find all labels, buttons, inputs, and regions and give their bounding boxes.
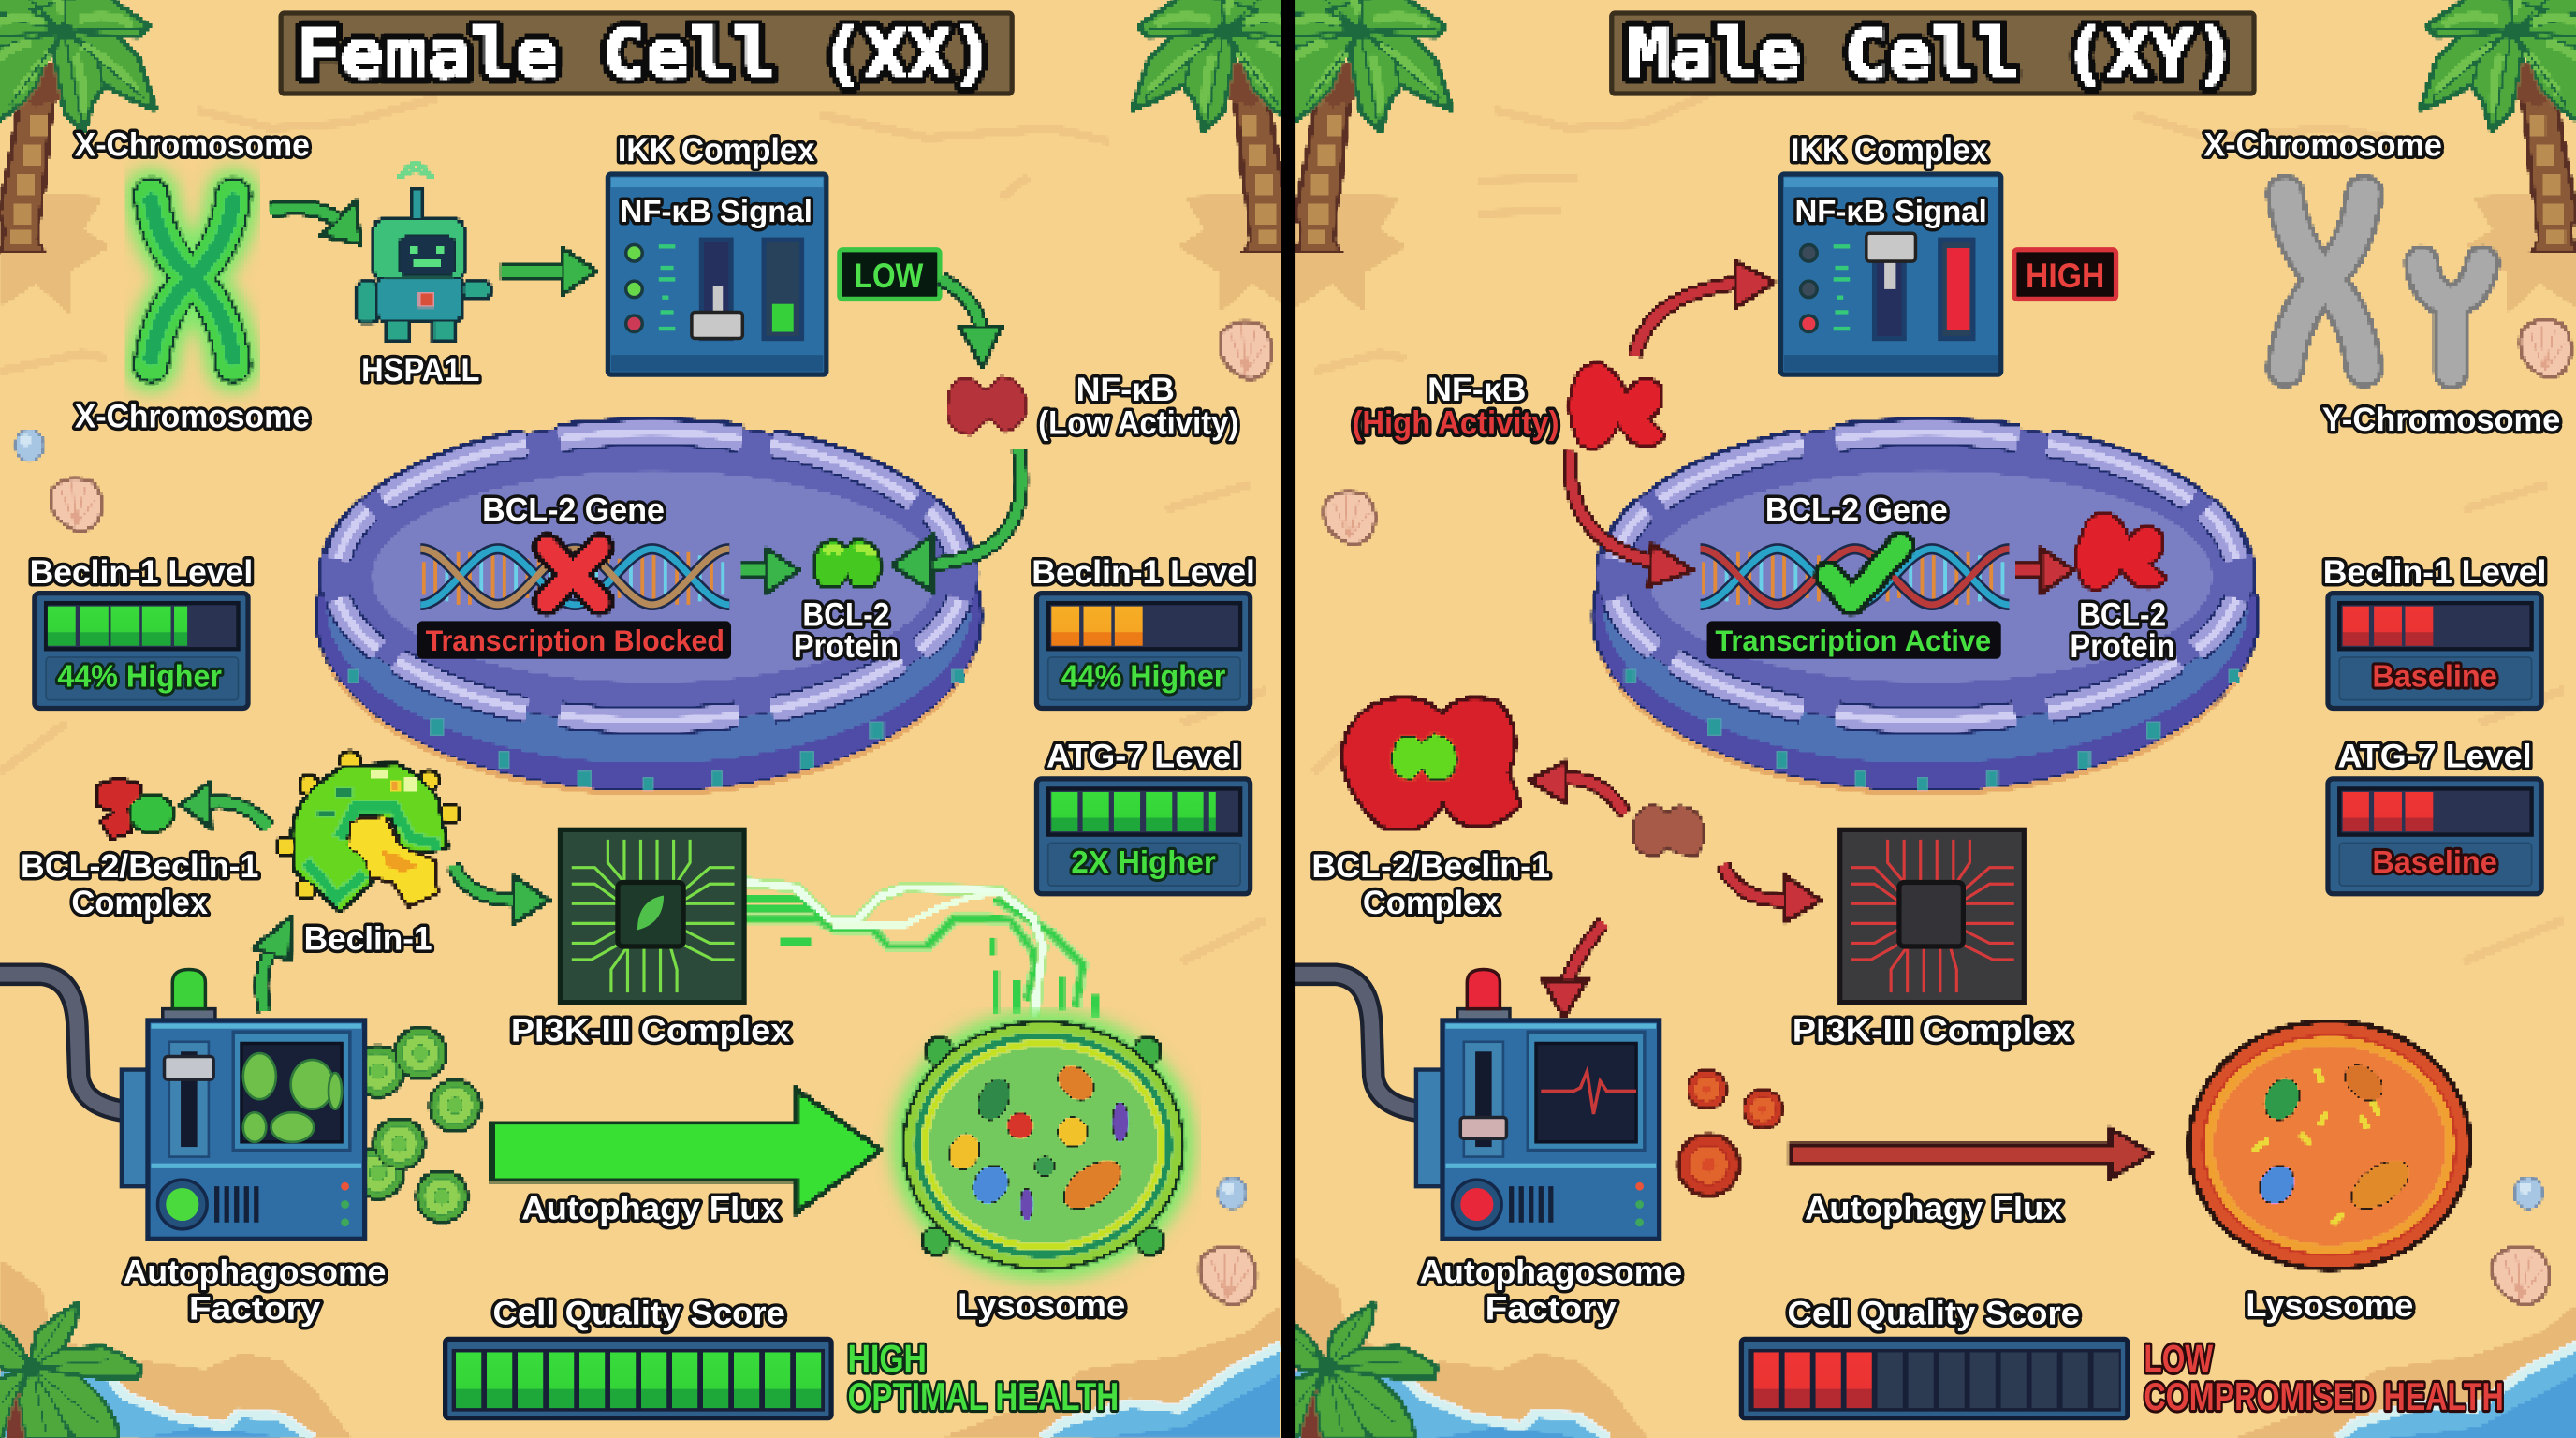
nucleus xyxy=(317,424,981,795)
panel: male cell xyxy=(1286,0,2576,1438)
DNA helix active xyxy=(1701,546,2009,605)
divider between panels xyxy=(1281,0,1295,1438)
label: ATG-7 Level: ATG-7 Level xyxy=(1046,739,1240,775)
lightning energy from PI3K to lysosome xyxy=(746,882,1096,1017)
icon: X chromosome glowing xyxy=(151,196,233,365)
palm tree bottom left xyxy=(0,1305,139,1438)
arrow: NF-kB to IKK xyxy=(1634,263,1773,355)
machine: autophagosome factory xyxy=(1292,970,1660,1239)
arrow: blob to complex xyxy=(1531,762,1625,814)
label: Autophagosome Factory xyxy=(124,1255,386,1327)
lysosome compromised xyxy=(2190,1022,2469,1269)
label: Transcription Active: Transcription Active xyxy=(1715,624,1991,657)
gauge: ATG-7 2X higher xyxy=(1036,779,1251,894)
label: BCL-2 Protein: Protein xyxy=(794,628,899,665)
arrow: LOW to NF-kB xyxy=(942,279,1001,365)
gauge: ATG-7 2X higher: 2X Higher xyxy=(1071,845,1216,880)
label: BCL-2 Protein: BCL-2 xyxy=(802,597,889,634)
icon: Beclin-1 low brown blob xyxy=(1633,807,1703,856)
autophagosome vesicles red xyxy=(1679,1071,1781,1195)
lysosome healthy xyxy=(892,1010,1194,1280)
signal light red xyxy=(1467,970,1500,1009)
chip: PI3K-III complex xyxy=(1840,829,2024,1003)
icon: BCL-2/Beclin-1 complex large xyxy=(1343,698,1519,829)
icon: BCL-2 protein red xyxy=(2077,514,2165,588)
chip: PI3K-III complex xyxy=(560,829,744,1003)
autophagosome vesicles xyxy=(353,1029,479,1221)
label: BCL-2 Gene: BCL-2 Gene xyxy=(482,492,665,528)
palm tree bottom left xyxy=(1290,1305,1436,1438)
gauge: Beclin-1 baseline xyxy=(2328,594,2541,708)
arrow: NF-kB to BCL-2 protein xyxy=(894,450,1021,590)
label: HIGH optimal health: OPTIMAL HEALTH xyxy=(848,1374,1119,1418)
title: Female Cell (XX): Female Cell (XX) xyxy=(297,14,995,93)
gauge: Beclin-1 baseline: Baseline xyxy=(2372,660,2497,695)
label: NF-kB low activity: (Low Activity) xyxy=(1038,404,1238,441)
icon: NF-kB high activity xyxy=(1570,364,1664,448)
label: LOW compromised health: LOW xyxy=(2144,1337,2213,1381)
label: Beclin-1 Level left: Beclin-1 Level xyxy=(30,554,253,591)
arrow: Beclin to complex xyxy=(183,784,268,827)
icon: NF-kB low activity xyxy=(948,378,1025,433)
label: NF-kB high activity xyxy=(1352,372,1559,441)
label: Transcription Blocked: Transcription Blocked xyxy=(426,624,724,657)
label: Cell Quality Score: Cell Quality Score xyxy=(1788,1296,2080,1332)
label: HIGH optimal health: HIGH xyxy=(848,1337,927,1381)
arrow: NF-kB into nucleus xyxy=(1570,452,1690,585)
label: X-Chromosome upper: X-Chromosome xyxy=(75,127,310,164)
machine: autophagosome factory xyxy=(0,970,365,1239)
label: Autophagosome Factory: Factory xyxy=(189,1290,321,1327)
label: BCL-2/Beclin-1 Complex xyxy=(21,848,258,921)
IKK control panel: NF-kB signal high xyxy=(1781,174,2001,374)
gauge: cell quality score high xyxy=(446,1339,831,1418)
label: NF-kB low activity xyxy=(1038,372,1238,441)
label: NF-kB Signal: NF-κB Signal xyxy=(621,195,812,229)
gauge: ATG-7 baseline: Baseline xyxy=(2372,845,2497,880)
arrow: DNA to protein xyxy=(741,550,797,592)
label: BCL-2 Protein xyxy=(2070,597,2175,665)
label: Beclin-1 Level: Beclin-1 Level xyxy=(2323,554,2546,591)
label: PI3K-III Complex: PI3K-III Complex xyxy=(1793,1013,2072,1049)
label: Autophagosome Factory: Autophagosome xyxy=(1419,1255,1682,1291)
shells and pebbles xyxy=(1325,321,2570,1303)
label: X-Chromosome: X-Chromosome xyxy=(2203,127,2442,164)
arrow: down to factory xyxy=(1544,923,1603,1016)
icon: grey X and Y chromosomes xyxy=(2285,194,2482,372)
label: NF-kB high activity: NF-κB xyxy=(1427,372,1526,408)
sand ripples xyxy=(1314,91,2563,961)
label: BCL-2 Protein: BCL-2 xyxy=(2079,597,2166,634)
label: IKK Complex: IKK Complex xyxy=(1791,132,1988,169)
beach and sea xyxy=(0,1260,1280,1438)
label: BCL-2 Protein xyxy=(794,597,899,665)
gauge: Beclin-1 44% higher green xyxy=(35,594,248,708)
shells and pebbles xyxy=(17,323,1271,1303)
arrow: blob to PI3K xyxy=(1723,866,1819,920)
label: HSPA1L: HSPA1L xyxy=(361,352,479,389)
title: Male Cell (XY): Male Cell (XY) xyxy=(1627,14,2237,93)
label: BCL-2/Beclin-1 Complex: BCL-2/Beclin-1 xyxy=(21,848,258,885)
gauge: ATG-7 baseline xyxy=(2328,779,2541,894)
arrow: big autophagy flux xyxy=(493,1091,879,1211)
badge: HIGH: HIGH xyxy=(2026,257,2104,295)
icon: BCL-2 protein green xyxy=(815,540,880,587)
palm tree top right xyxy=(2422,0,2576,312)
label: IKK Complex: IKK Complex xyxy=(618,132,815,169)
label: Beclin-1 Level right: Beclin-1 Level xyxy=(1032,554,1255,591)
label: BCL-2/Beclin-1 Complex: Complex xyxy=(71,885,208,921)
label: HIGH optimal health xyxy=(848,1337,1119,1418)
label: LOW compromised health xyxy=(2144,1337,2504,1418)
palm tree top left xyxy=(1286,0,1451,312)
arrow: X to HSPA1L xyxy=(271,204,359,243)
label: ATG-7 Level: ATG-7 Level xyxy=(2338,739,2532,775)
label: BCL-2/Beclin-1 Complex xyxy=(1311,848,1550,921)
IKK control panel: NF-kB signal low xyxy=(607,174,827,374)
palm tree top right xyxy=(1134,0,1298,312)
arrow: thin autophagy flux xyxy=(1791,1131,2150,1177)
label: Autophagosome Factory: Autophagosome xyxy=(124,1255,386,1291)
arrow: Beclin to PI3K xyxy=(453,866,547,922)
gauge: Beclin-1 44% higher orange xyxy=(1036,594,1251,708)
arrow: DNA to protein xyxy=(2016,550,2071,592)
label: NF-kB Signal: NF-κB Signal xyxy=(1794,195,1987,229)
gauge: Beclin-1 44% higher orange: 44% Higher xyxy=(1061,660,1225,695)
panel: female cell xyxy=(0,0,1298,1438)
DNA helix blocked xyxy=(420,547,729,605)
label: Autophagosome Factory xyxy=(1419,1255,1682,1327)
gauge: Beclin-1 44% higher green: 44% Higher xyxy=(57,660,222,695)
label: X-Chromosome lower: X-Chromosome xyxy=(75,398,310,434)
label: Autophagy Flux: Autophagy Flux xyxy=(1805,1190,2063,1226)
nucleus xyxy=(1593,424,2258,795)
icon: Beclin-1 xyxy=(277,752,460,910)
palm tree top left xyxy=(0,0,154,312)
sand ripples xyxy=(0,98,1265,961)
label: Autophagosome Factory: Factory xyxy=(1486,1290,1617,1327)
badge: LOW: LOW xyxy=(855,257,924,295)
label: BCL-2 Gene: BCL-2 Gene xyxy=(1765,492,1948,528)
label: BCL-2/Beclin-1 Complex: Complex xyxy=(1363,885,1500,921)
label: NF-kB high activity: (High Activity) xyxy=(1352,404,1559,441)
label: PI3K-III Complex: PI3K-III Complex xyxy=(511,1013,791,1049)
label: BCL-2 Protein: Protein xyxy=(2070,628,2175,665)
icon: BCL-2/Beclin-1 complex small xyxy=(98,779,172,838)
label: Y-Chromosome: Y-Chromosome xyxy=(2322,402,2560,438)
label: Autophagy Flux: Autophagy Flux xyxy=(521,1190,780,1226)
label: Beclin-1: Beclin-1 xyxy=(304,920,432,957)
label: BCL-2/Beclin-1 Complex: BCL-2/Beclin-1 xyxy=(1311,848,1550,885)
icon: red X xyxy=(547,547,600,601)
label: NF-kB low activity: NF-κB xyxy=(1076,372,1175,408)
beach and sea xyxy=(1296,1260,2576,1438)
badge: HIGH xyxy=(2014,250,2116,299)
signal light green xyxy=(172,970,205,1009)
arrow: HSPA1L to IKK xyxy=(501,250,594,292)
badge: LOW xyxy=(840,250,940,299)
arrow: factory to Beclin xyxy=(255,918,291,1010)
label: Lysosome: Lysosome xyxy=(2246,1287,2413,1324)
icon: HSPA1L robot xyxy=(359,165,490,340)
gauge: cell quality score low xyxy=(1741,1339,2128,1418)
label: Lysosome: Lysosome xyxy=(958,1287,1125,1324)
label: Cell Quality Score: Cell Quality Score xyxy=(493,1296,785,1332)
icon: green check xyxy=(1828,546,1901,601)
